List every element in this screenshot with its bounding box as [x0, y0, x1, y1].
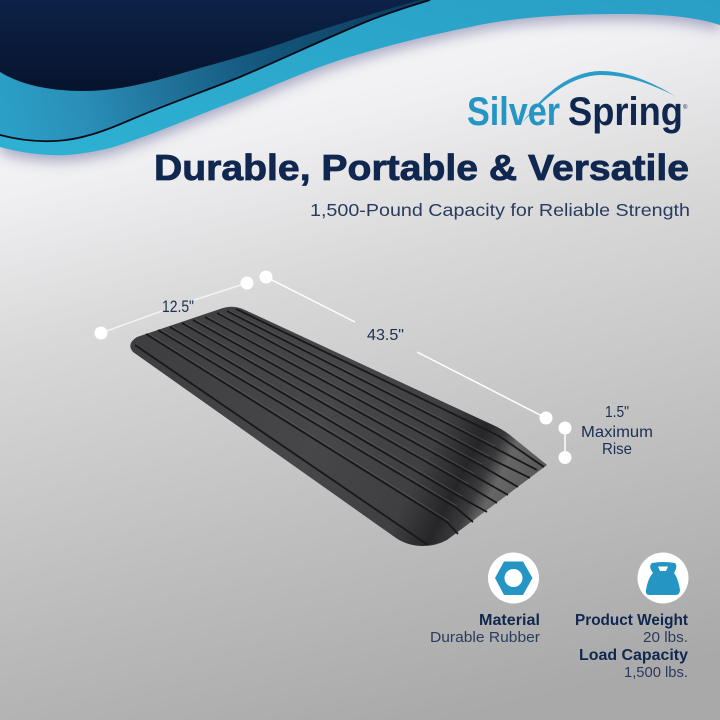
ramp body — [130, 307, 547, 546]
title: Durable, Portable & Versatile — [154, 147, 689, 188]
logo registered mark: ® — [683, 104, 688, 111]
material value: Durable Rubber — [430, 629, 540, 646]
logo wordmark: Silver: Silver — [467, 90, 560, 134]
groove highlights — [149, 311, 495, 521]
subtitle: 1,500-Pound Capacity for Reliable Strength — [310, 200, 690, 220]
width label: 12.5" — [162, 298, 194, 316]
length lines — [266, 277, 546, 418]
material spec — [430, 612, 540, 646]
black edge line — [0, 0, 430, 141]
rise label: Rise — [602, 441, 632, 458]
dimension: rise — [558, 404, 653, 464]
dimension: width — [94, 276, 254, 340]
dimension: length — [260, 270, 552, 424]
wave header — [0, 0, 720, 161]
rise line — [564, 428, 566, 457]
rise label: Maximum — [581, 424, 653, 441]
icon: weight — [638, 552, 688, 604]
logo wordmark: Spring: Spring — [568, 90, 683, 134]
logo arc — [522, 71, 677, 123]
rise end dot — [558, 422, 572, 434]
width end dot — [240, 276, 254, 290]
material heading: Material — [479, 612, 540, 629]
width end dot — [94, 326, 108, 340]
mid blue band — [0, 0, 430, 141]
length end dot — [540, 412, 552, 424]
icon: hex nut — [488, 552, 539, 604]
capacity value: 1,500 lbs. — [624, 664, 688, 681]
ramp grooves — [135, 309, 544, 545]
weight heading: Product Weight — [575, 612, 688, 629]
product: rubber ramp — [130, 307, 547, 546]
weight and capacity spec — [575, 612, 688, 681]
weight value: 20 lbs. — [643, 629, 688, 646]
rise label — [581, 404, 653, 458]
light blue band — [0, 0, 720, 155]
navy wave — [0, 0, 420, 91]
brand logo — [467, 71, 688, 134]
length end dot — [260, 270, 272, 284]
width lines — [101, 283, 247, 333]
rise label: 1.5" — [605, 404, 629, 421]
capacity heading: Load Capacity — [579, 647, 688, 664]
length label: 43.5" — [367, 327, 404, 344]
wave shadow — [0, 0, 720, 161]
rise end dot — [558, 451, 572, 464]
